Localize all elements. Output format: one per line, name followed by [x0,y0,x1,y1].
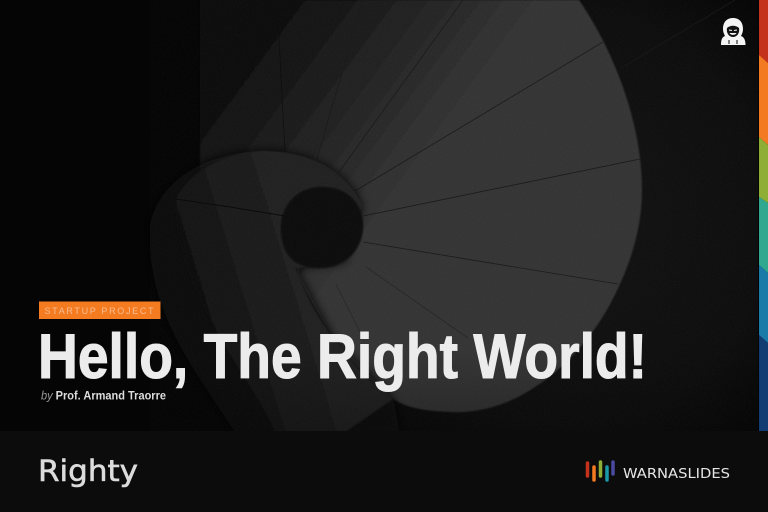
author byline: by Prof. Armand Traorre [41,390,166,402]
tag: startup project [39,302,160,319]
logo bars [588,462,613,480]
spiral centre hole [281,187,363,268]
colour stripe [759,0,768,431]
tag: startup project: STARTUP PROJECT [44,306,154,316]
coiled spiral tube [150,151,400,432]
spoke lines [277,0,735,338]
logo: warnaslides: WARNASLIDES [623,467,730,482]
brand name: Righty [38,454,138,488]
spiral staircase disk [200,0,642,412]
logo: warnaslides [588,462,730,482]
title: Hello, The Right World! [38,322,647,392]
footer band [0,431,768,512]
icon: hooded figure [721,18,746,45]
